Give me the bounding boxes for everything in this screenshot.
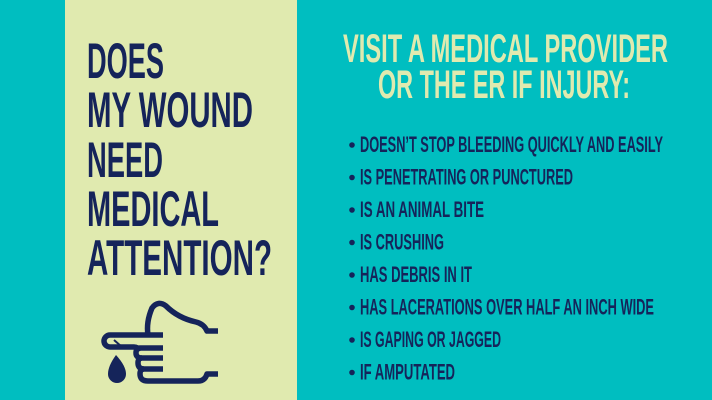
- list item 7: [349, 327, 501, 352]
- list item 8: [349, 360, 455, 384]
- title: does my wound need medical attention: MY WOUND: [87, 82, 253, 138]
- list item 3: IS AN ANIMAL BITE: [360, 197, 484, 222]
- title: does my wound need medical attention: MEDICAL: [87, 181, 219, 237]
- list item 8: IF AMPUTATED: [360, 360, 455, 384]
- list item 2: [349, 164, 573, 190]
- panel: left question panel: [65, 0, 297, 400]
- title: does my wound need medical attention: DOES: [87, 33, 164, 89]
- icon: bleeding hand: [104, 303, 218, 383]
- heading: visit a medical provider: [343, 27, 668, 107]
- list item 5: HAS DEBRIS IN IT: [360, 262, 472, 287]
- title: does my wound need medical attention: NEED: [87, 132, 163, 188]
- list item 7: IS GAPING OR JAGGED: [360, 327, 501, 352]
- list: injury criteria: [349, 132, 663, 384]
- list item 5: [349, 262, 472, 287]
- title: does my wound need medical attention: [87, 33, 272, 286]
- list item 4: IS CRUSHING: [360, 230, 444, 254]
- list item 4: [349, 230, 444, 254]
- title: does my wound need medical attention: ATTENTION?: [87, 230, 272, 286]
- list item 3: [349, 197, 484, 222]
